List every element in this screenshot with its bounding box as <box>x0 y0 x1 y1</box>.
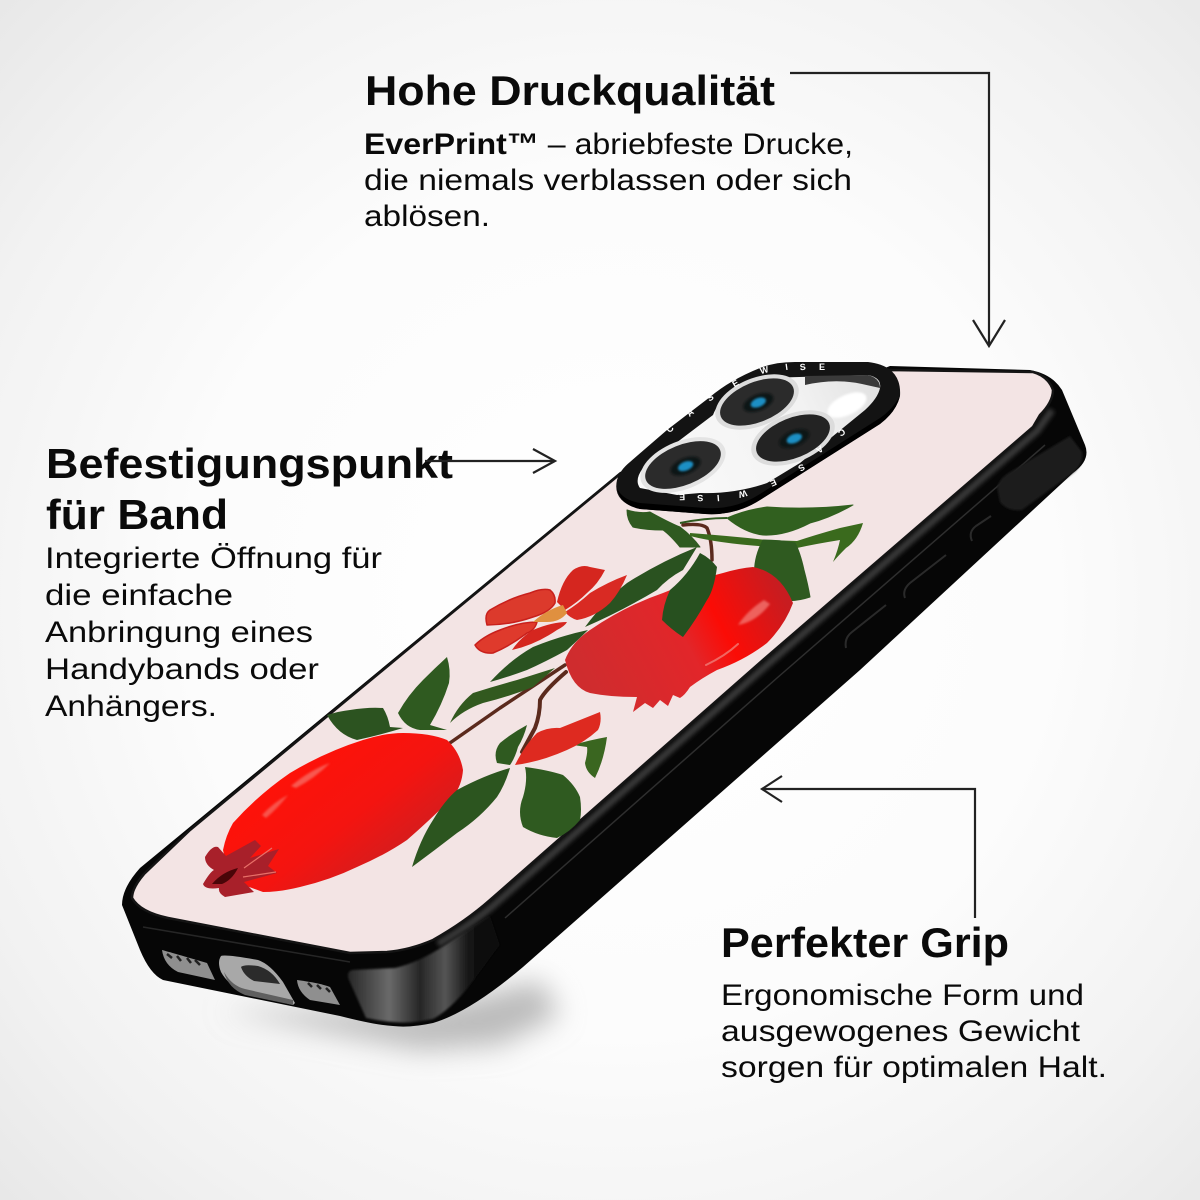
pomegranate calyx <box>203 840 279 897</box>
pomegranate lower <box>223 733 463 892</box>
leaf: lower long <box>412 768 510 867</box>
soft bezel strip along long edge <box>438 410 1052 944</box>
left speaker grill <box>162 950 215 980</box>
flash <box>824 387 870 423</box>
brand lettering on camera ring: W <box>759 364 770 376</box>
leaf: right stem <box>690 523 863 562</box>
text block: grip description <box>721 979 1107 1084</box>
brand lettering on camera ring: E <box>768 477 778 489</box>
bottom ridge line <box>143 927 350 962</box>
right speaker grill <box>297 980 340 1005</box>
phone drop shadow <box>220 980 560 1050</box>
leaf: lower right large <box>520 767 581 838</box>
arrow: attachment point <box>425 449 555 473</box>
volume button low <box>846 605 886 648</box>
USB port <box>219 956 295 1005</box>
floral artwork <box>203 505 863 897</box>
text block: EverPrint description: ablösen. <box>364 200 490 233</box>
brand lettering on camera ring: E <box>679 492 685 502</box>
inner frame shade <box>805 375 880 388</box>
text block: EverPrint description: die niemals verblassen oder sich <box>364 164 852 197</box>
heading: Perfekter Grip: Perfekter Grip <box>721 919 1009 966</box>
lens left <box>632 426 734 504</box>
heading: Befestigungspunkt für Band: Befestigungspunkt <box>46 440 453 487</box>
side ridge line <box>505 445 1045 918</box>
brand lettering on camera ring: C <box>836 426 847 439</box>
top side patch <box>997 436 1082 510</box>
leaf: long middle <box>585 547 697 627</box>
flower bud <box>515 712 601 765</box>
leaf: lower left of stem <box>450 668 555 723</box>
text block: attachment description: Integrierte Öffnung für <box>45 542 382 575</box>
arrow: print quality <box>790 73 1005 346</box>
text block: grip description: ausgewogenes Gewicht <box>721 1015 1081 1048</box>
brand lettering on camera ring: S <box>796 462 807 473</box>
text block: attachment description: Handybands oder <box>45 653 319 686</box>
lens right <box>743 399 843 477</box>
leaf: upper left <box>398 657 450 730</box>
phone case <box>122 366 1086 1027</box>
leaf: far left <box>327 708 403 740</box>
brand lettering on camera ring: I <box>717 493 720 503</box>
lens top <box>707 363 807 441</box>
text block: EverPrint description: EverPrint™ – abriebfeste Drucke, <box>364 128 853 161</box>
pink back panel <box>132 370 1053 953</box>
camera bump frame <box>616 362 900 514</box>
camera bump lower lip <box>617 396 900 514</box>
text block: EverPrint description <box>364 128 853 233</box>
text block: grip description: Ergonomische Form und <box>721 979 1084 1012</box>
flower centre <box>533 605 567 622</box>
brand lettering on camera ring <box>664 362 847 503</box>
text block: grip description: sorgen für optimalen Halt. <box>721 1051 1107 1084</box>
bottom corner highlight <box>348 915 500 1023</box>
text block: attachment description: Anbringung eines <box>45 616 313 649</box>
brand lettering on camera ring: A <box>684 406 696 419</box>
brand lettering on camera ring: S <box>799 362 806 372</box>
leaf: top right <box>680 505 853 535</box>
arrow: grip <box>762 776 975 918</box>
pomegranate upper <box>565 567 793 712</box>
heading: Befestigungspunkt für Band <box>46 440 453 538</box>
side switch <box>971 516 991 541</box>
leaf: center over fruit <box>662 553 717 637</box>
text block: attachment description: die einfache <box>45 579 233 612</box>
flower <box>475 566 627 653</box>
brand lettering on camera ring: C <box>664 423 676 435</box>
brand lettering on camera ring: E <box>730 378 741 389</box>
brand lettering on camera ring: S <box>705 392 716 403</box>
camera module <box>616 362 900 514</box>
stems <box>447 524 712 752</box>
leaf: small right of bud <box>573 737 607 778</box>
case side body <box>122 366 1086 1027</box>
leaf: lower middle <box>490 630 588 682</box>
heading: Befestigungspunkt für Band: für Band <box>46 491 228 538</box>
text block: attachment description: Anhängers. <box>45 690 217 723</box>
volume button high <box>904 555 946 598</box>
brand lettering on camera ring: E <box>819 362 825 372</box>
brand lettering on camera ring: I <box>785 362 789 372</box>
leaf: right large <box>755 540 810 601</box>
glass plate <box>638 375 880 495</box>
text block: attachment description <box>45 542 382 723</box>
leaf: small near bud <box>496 725 527 765</box>
leaf: top left under camera <box>627 510 700 547</box>
brand lettering on camera ring: S <box>697 493 704 503</box>
heading: Hohe Druckqualität: Hohe Druckqualität <box>365 67 775 114</box>
brand lettering on camera ring: A <box>814 443 825 456</box>
brand lettering on camera ring: W <box>737 488 748 500</box>
